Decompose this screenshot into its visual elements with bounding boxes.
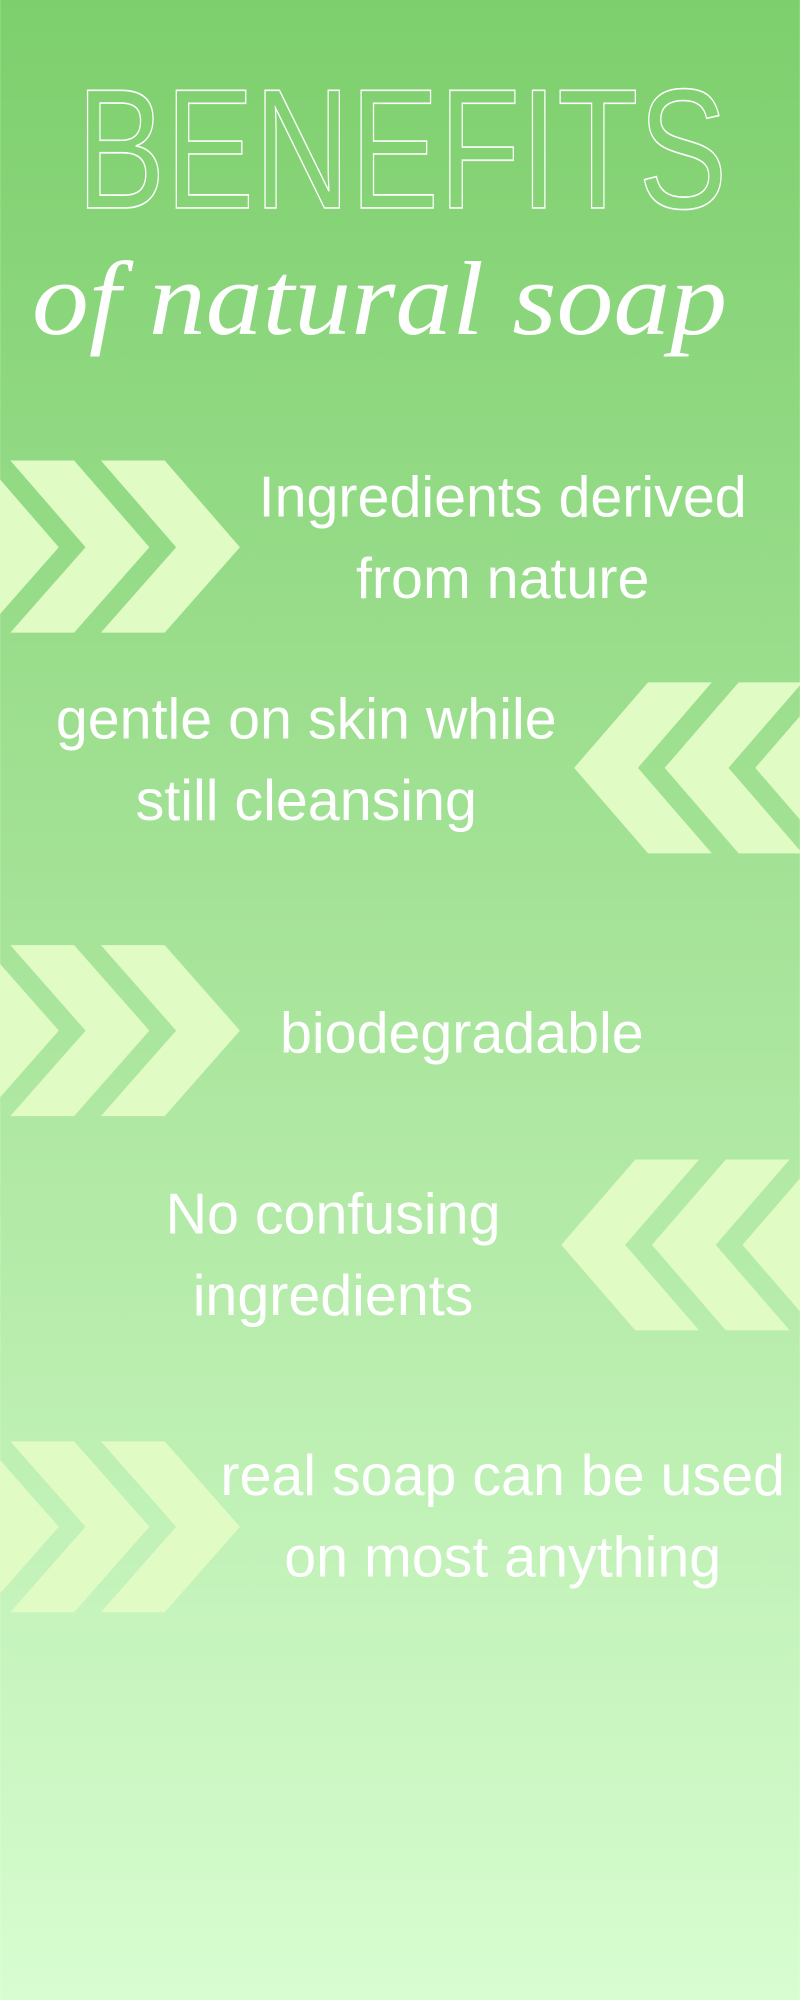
chevrons row 1 <box>0 460 240 633</box>
text row 1: from nature <box>356 547 649 611</box>
chevrons row 4 <box>561 1159 800 1330</box>
text row 2: still cleansing <box>136 769 477 833</box>
subtitle script: of natural soap <box>32 241 727 357</box>
text row 3: biodegradable <box>280 1001 644 1065</box>
text row 1: Ingredients derived <box>259 466 747 530</box>
text row 4: ingredients <box>193 1264 473 1328</box>
text row 5: on most anything <box>284 1526 721 1590</box>
text row 5: real soap can be used <box>220 1444 785 1508</box>
text row 4: No confusing <box>166 1182 500 1246</box>
chevrons row 5 <box>0 1441 240 1612</box>
chevrons row 3 <box>0 945 240 1116</box>
chevrons row 2 <box>574 682 800 853</box>
text row 2: gentle on skin while <box>56 688 557 752</box>
